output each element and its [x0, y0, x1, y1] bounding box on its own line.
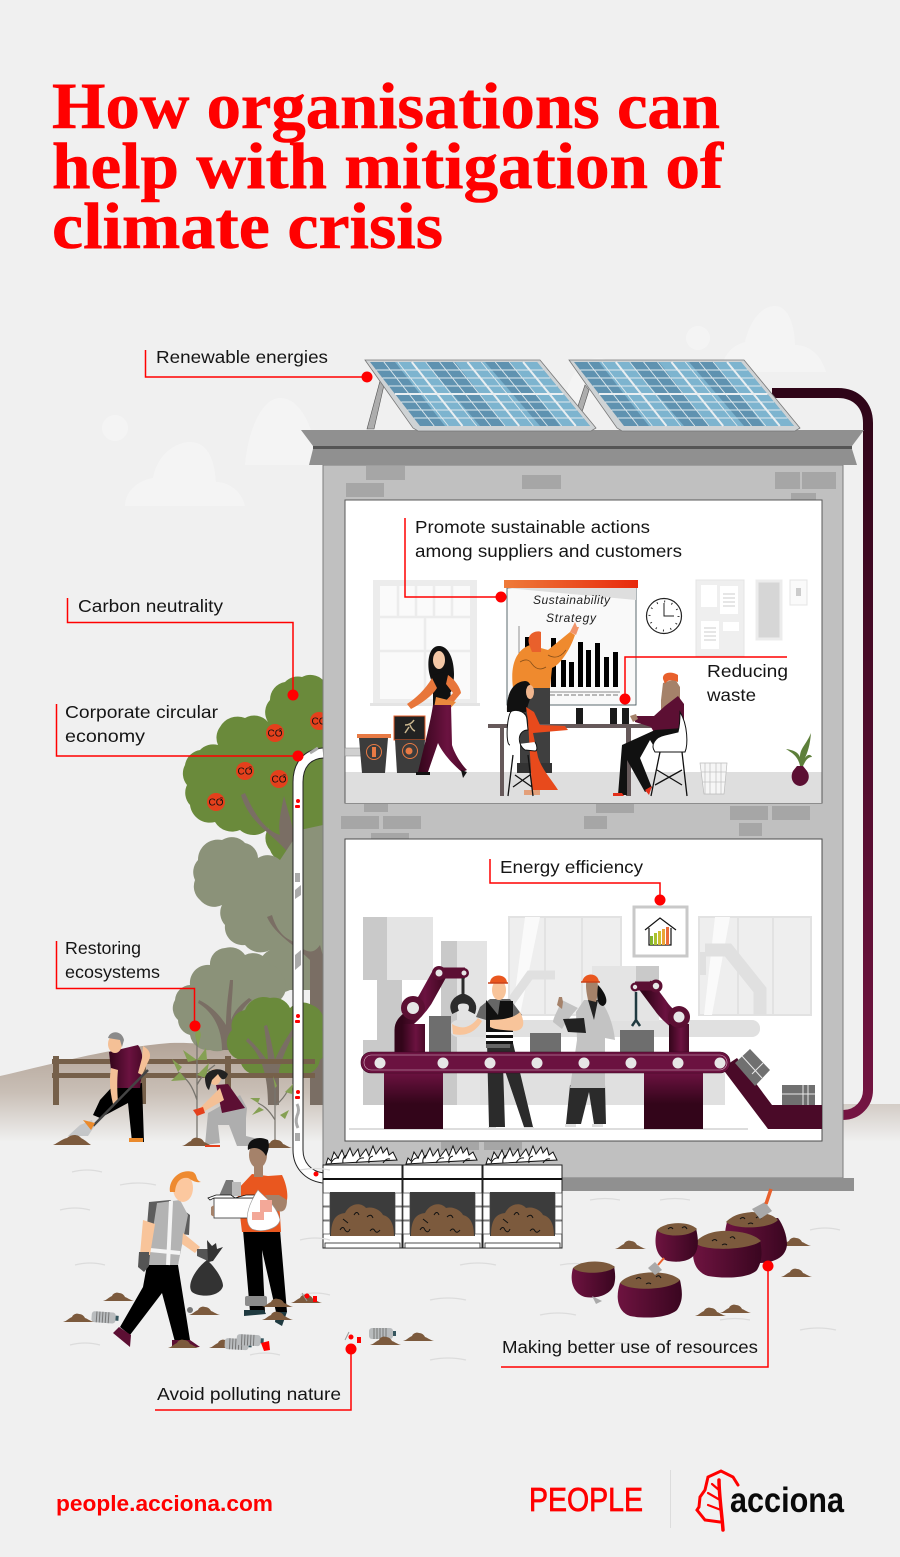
rubbish bag [190, 1240, 223, 1296]
recycling chute [295, 748, 323, 1178]
title: help with mitigation of [52, 130, 724, 203]
solar panels [365, 360, 800, 431]
callout: renewable energies: Renewable energies [156, 347, 328, 367]
tree: grey-green small [173, 947, 286, 1051]
solar panel 2 [569, 360, 800, 431]
wall frame [757, 581, 781, 639]
title: How organisations can [52, 70, 720, 143]
office floor [346, 772, 822, 803]
sack back [725, 1212, 787, 1263]
building [301, 430, 864, 1191]
robot arm right [630, 980, 690, 1053]
worker right [553, 974, 615, 1127]
notice board [696, 580, 744, 656]
shovel in sack [752, 1189, 772, 1219]
bottles on table [576, 708, 629, 724]
presentation board: Strategy [546, 611, 597, 625]
bricks [341, 466, 836, 1150]
callout: restoring ecosystems [56, 938, 200, 1032]
presentation board [504, 580, 638, 705]
potted plant [786, 733, 812, 786]
people wordmark: PEOPLE [529, 1481, 643, 1518]
person with box and bag [208, 1138, 287, 1326]
recycling bins [345, 716, 425, 773]
chair right [651, 712, 687, 796]
box of bottles [208, 1180, 255, 1218]
sack small [572, 1261, 615, 1298]
conveyor belt [361, 1052, 822, 1129]
boxes on conveyor [429, 1016, 654, 1052]
ground marks [60, 1168, 840, 1360]
tree: green small [227, 997, 328, 1105]
presentation board: Sustainability [533, 593, 611, 607]
website link: people.acciona.com [56, 1491, 273, 1516]
callout: restoring ecosystems: ecosystems [65, 962, 160, 982]
energy pipe [772, 393, 868, 1115]
compost bins [323, 1146, 562, 1248]
woman walking [407, 646, 467, 778]
callout: reducing waste [620, 657, 788, 705]
factory floor line [349, 1128, 748, 1130]
callout: making better use of resources: Making better use of resources [502, 1337, 758, 1357]
callout: reducing waste: waste [706, 685, 756, 705]
roof [301, 430, 864, 465]
tree: grey-green background [193, 825, 324, 1105]
panel supports [367, 381, 589, 429]
table [488, 724, 668, 796]
callout: promote sustainable actions: Promote sustainable actions [415, 517, 650, 537]
footer [56, 1470, 844, 1530]
trowels [592, 1258, 664, 1304]
acciona wordmark: acciona [730, 1481, 844, 1520]
title: climate crisis [52, 190, 443, 263]
person digging [53, 1032, 150, 1145]
resource sacks [572, 1189, 812, 1318]
rubbish on the ground [63, 1293, 434, 1351]
clock [646, 598, 682, 634]
callout: promote sustainable actions [405, 517, 682, 602]
acciona leaf logo [697, 1471, 738, 1530]
callout: corporate circular economy: Corporate circular [65, 702, 218, 722]
trees [173, 675, 330, 1105]
callout: energy efficiency: Energy efficiency [500, 857, 643, 877]
room: office [345, 500, 822, 803]
divider [670, 1470, 671, 1528]
recycled items on chute [295, 748, 318, 1176]
sack upper left [655, 1223, 698, 1262]
light switch [790, 580, 807, 605]
man at board [512, 622, 579, 773]
waste basket [700, 763, 727, 794]
callout: promote sustainable actions: among suppliers and customers [415, 541, 682, 561]
room: factory [345, 839, 822, 1141]
callout: energy efficiency [490, 857, 666, 906]
callout: avoid polluting nature [155, 1344, 356, 1410]
sapling [171, 1023, 220, 1142]
plastic bag [247, 1190, 280, 1231]
ground hills [0, 1043, 900, 1142]
callout: corporate circular economy: economy [65, 726, 145, 746]
robot arm left [401, 966, 475, 1053]
tree: green with CO2 [183, 675, 330, 862]
woman seated [507, 681, 568, 795]
callout: corporate circular economy [56, 702, 304, 762]
sapling right [250, 1076, 293, 1148]
building base [323, 1178, 854, 1191]
fence [52, 1056, 315, 1105]
callout: carbon neutrality: Carbon neutrality [78, 596, 223, 616]
callout: reducing waste: Reducing [707, 661, 788, 681]
building wall [323, 465, 843, 1178]
sack middle [693, 1231, 762, 1278]
gift boxes [735, 1049, 815, 1105]
background machinery [363, 917, 811, 1105]
solar panel 1 [365, 360, 596, 431]
callout: renewable energies [146, 347, 372, 382]
callout: restoring ecosystems: Restoring [65, 938, 141, 958]
office window [370, 580, 480, 706]
chair left [507, 710, 537, 796]
callout: carbon neutrality [68, 596, 298, 700]
sack front [618, 1272, 682, 1318]
bar chart [525, 637, 618, 687]
person collecting rubbish [113, 1171, 223, 1347]
worker left [452, 976, 534, 1130]
callout: making better use of resources [501, 1260, 774, 1367]
person planting [171, 1023, 262, 1147]
clouds [102, 306, 826, 506]
title [52, 70, 724, 263]
man seated [613, 673, 684, 796]
callout: avoid polluting nature: Avoid polluting nature [157, 1384, 341, 1404]
energy rating frame [634, 907, 687, 956]
